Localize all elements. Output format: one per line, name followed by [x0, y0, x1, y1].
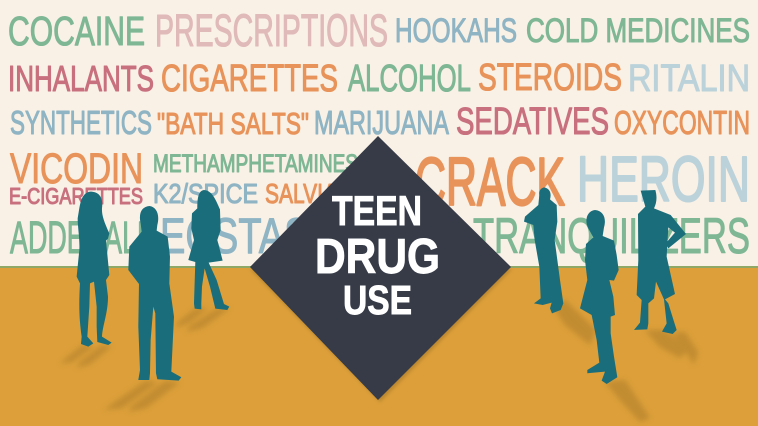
figure: man right in shorts, hand on hip — [634, 190, 686, 334]
title: teen drug use: DRUG — [315, 230, 440, 284]
word: adderall: ADDERALL — [10, 212, 152, 263]
title: teen drug use: TEEN — [332, 187, 422, 234]
title: teen drug use — [315, 187, 440, 323]
figure: woman right in dress — [580, 210, 619, 384]
word: crack: CRACK — [415, 144, 565, 220]
word: synthetics: SYNTHETICS — [10, 104, 152, 141]
word: hookahs: HOOKAHS — [395, 12, 517, 50]
floor edge line — [0, 266, 758, 268]
word: sedatives: SEDATIVES — [456, 101, 609, 143]
word: methamphetamines: METHAMPHETAMINES — [153, 150, 358, 178]
word: steroids: STEROIDS — [478, 57, 622, 99]
word: cocaine: COCAINE — [8, 8, 145, 54]
word: marijuana: MARIJUANA — [314, 104, 449, 141]
word: inhalants: INHALANTS — [8, 58, 154, 99]
word: k2/spice: K2/SPICE — [153, 178, 258, 209]
figure: man right with folded arms — [524, 187, 563, 313]
word: vicodin: VICODIN — [10, 145, 143, 193]
figure shadows — [60, 300, 698, 422]
word: bath salts: "BATH SALTS" — [157, 106, 309, 141]
figure: man left in long trousers — [128, 206, 181, 381]
word: ecstasy: ECSTASY — [160, 208, 335, 264]
figure: woman left with crossed arms — [77, 192, 112, 347]
word: alcohol: ALCOHOL — [348, 58, 471, 100]
panel: cream wall background — [0, 0, 758, 267]
diamond drop shadow — [250, 269, 512, 402]
figure: woman in dress, back left — [188, 190, 229, 310]
title: teen drug use: USE — [343, 277, 412, 323]
word: cigarettes: CIGARETTES — [161, 58, 338, 100]
word: salvia: SALVIA — [265, 178, 337, 209]
word: e-cigarettes: E-CIGARETTES — [9, 183, 143, 209]
word wall of drug names — [8, 5, 750, 264]
panel: mustard floor — [0, 267, 758, 426]
panel: central title diamond — [250, 136, 511, 400]
word: prescriptions: PRESCRIPTIONS — [155, 5, 388, 56]
